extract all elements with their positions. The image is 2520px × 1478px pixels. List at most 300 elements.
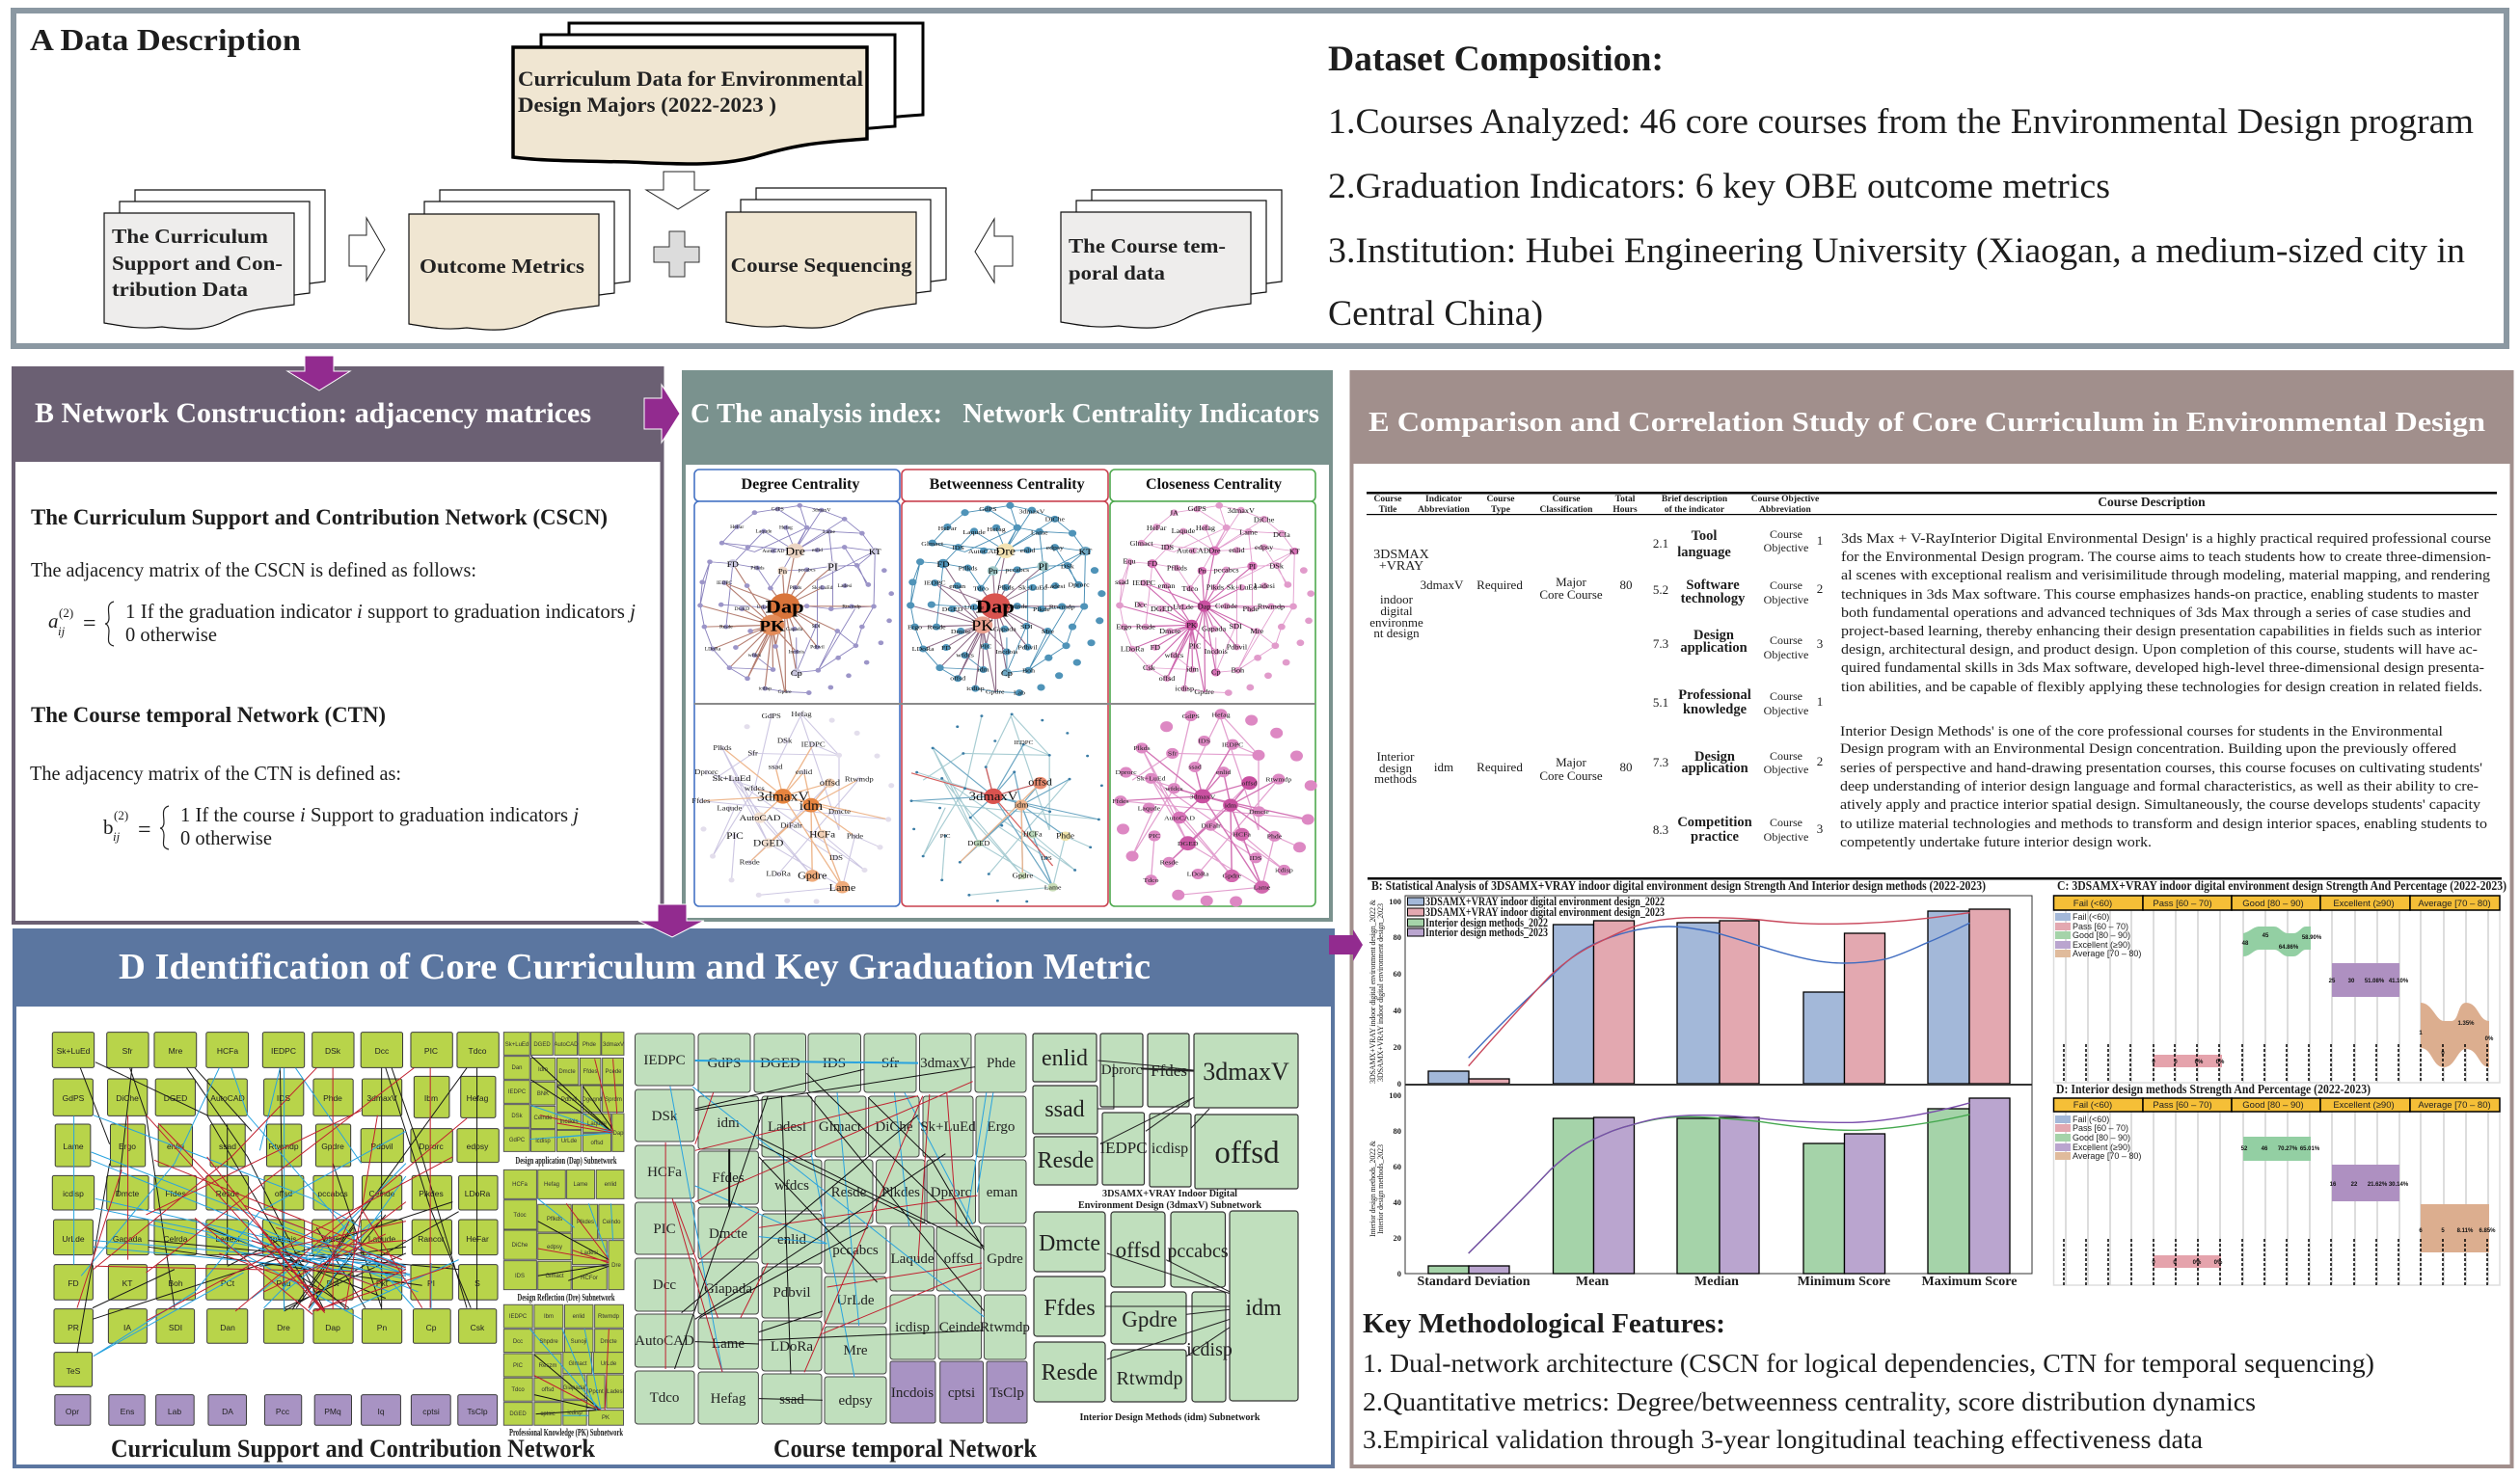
graph: betweenness centrality CSCN: GdPS <box>979 506 997 513</box>
document stack: curriculum support data: tribution Data <box>112 278 249 301</box>
subnetwork: design reflection: Plkdes <box>577 1220 594 1225</box>
subnetwork: idm: Ffdes <box>1043 1296 1096 1321</box>
chart D: interior design strength and percentage: 16 <box>2330 1182 2337 1188</box>
course temporal network: Lame <box>712 1336 745 1352</box>
course table: design <box>1379 761 1412 775</box>
document stack: course sequencing: Course Sequencing <box>731 254 912 277</box>
course table: Course <box>1770 749 1802 763</box>
CSCN definition <box>31 505 636 646</box>
graph: betweenness centrality CTN: DGED <box>967 839 990 847</box>
curriculum support and contribution network: Mre <box>169 1046 183 1056</box>
subnetwork: design application: Pcede <box>605 1069 622 1075</box>
course temporal network: IDS <box>823 1056 846 1071</box>
curriculum support and contribution network: DSk <box>325 1046 341 1056</box>
curriculum support and contribution network: IEDPC <box>271 1046 296 1056</box>
subnetwork: professional knowledge: icdisp <box>567 1411 583 1416</box>
curriculum support and contribution network: Pcc <box>276 1407 290 1416</box>
subnetwork: professional knowledge: UrLde <box>601 1361 617 1367</box>
caption: CTN: Course temporal Network <box>773 1435 1038 1463</box>
graph: closeness centrality CSCN: icdisp <box>1175 685 1194 692</box>
course description: 3dmaxV: for the Environmental Design program. The course aims to teach students how to create three-dimension- <box>1841 550 2491 565</box>
dataset composition text: 2.Graduation Indicators: 6 key OBE outcome metrics <box>1328 167 2110 206</box>
course table: Software <box>1686 578 1740 593</box>
chart C bands <box>2154 927 2489 1067</box>
course table: 5.2 <box>1653 582 1668 597</box>
graph: degree centrality CSCN: wfdcs <box>748 653 761 658</box>
course temporal network: Ffdes <box>712 1170 745 1186</box>
graph: degree centrality CSCN: Gapada <box>786 627 803 632</box>
graph: closeness centrality CSCN: FD <box>1148 560 1158 568</box>
graph: degree centrality CSCN: AutoCAD <box>762 549 785 554</box>
graph: degree centrality CSCN: PK <box>759 617 785 634</box>
chart C legend <box>2055 912 2141 958</box>
document stack: curriculum data: Design Majors (2022-2023 ) <box>518 93 776 117</box>
panel C: centrality indicators: Closeness Centrality <box>1146 476 1282 493</box>
graph: betweenness centrality CSCN: icdisp <box>966 685 985 692</box>
graph: degree centrality CTN: PIC <box>726 832 744 842</box>
subnetwork: design application: Ceinde <box>533 1115 553 1121</box>
chart D: interior design strength and percentage: D: Interior design methods Strength And Percentage (2022-2023) <box>2056 1082 2371 1096</box>
subnetwork: professional knowledge: Rtwmdp <box>598 1314 620 1320</box>
subnetwork: professional knowledge: Glmact <box>568 1361 587 1367</box>
chart D: interior design strength and percentage: 65.01% <box>2300 1146 2320 1152</box>
graph: closeness centrality CTN: IDS <box>1250 855 1261 862</box>
graph: degree centrality CSCN: Pn <box>778 568 787 576</box>
curriculum support and contribution network: Sfr <box>122 1046 133 1056</box>
subnetwork: design application: Dan <box>511 1065 523 1071</box>
curriculum support and contribution network: ssad <box>219 1142 236 1151</box>
graph: degree centrality CSCN <box>700 505 891 695</box>
subnetwork: professional knowledge: IEDPC <box>509 1314 528 1320</box>
graph: degree centrality CTN: idm <box>799 799 824 814</box>
course table: 5.1 <box>1653 695 1668 710</box>
subnetwork: idm: pccabcs <box>1167 1241 1229 1262</box>
course temporal network: ssad <box>779 1392 804 1408</box>
chart C: 3DSMAX strength and percentage: 41.10% <box>2389 979 2409 984</box>
chart B: statistical analysis bars: Interior design methods_2023 <box>1376 1144 1385 1234</box>
icon: plus <box>654 231 699 277</box>
course temporal network: Mre <box>843 1343 868 1358</box>
chart B axes labels: 20 <box>1393 1042 1401 1052</box>
curriculum support and contribution network: Lame <box>63 1142 84 1151</box>
course table: environme <box>1369 615 1423 630</box>
chart D: interior design strength and percentage: 30.14% <box>2389 1182 2409 1188</box>
graph: degree centrality CTN: Dmcte <box>828 808 851 816</box>
graph: betweenness centrality CTN: PIC <box>940 834 951 840</box>
subnetwork: professional knowledge: enlid <box>573 1314 584 1320</box>
curriculum support and contribution network: PIC <box>424 1046 438 1056</box>
course temporal network: Rtwmdp <box>980 1320 1030 1335</box>
course description: idm <box>1840 724 2487 850</box>
curriculum support and contribution network: Dre <box>277 1323 290 1332</box>
subnetwork: professional knowledge: Sunoji <box>571 1339 586 1345</box>
graph: closeness centrality CTN: DiFalr <box>1201 822 1221 829</box>
graph: closeness centrality CSCN: DSk <box>1269 562 1284 570</box>
curriculum support and contribution network: IA <box>123 1323 131 1332</box>
course temporal network: Hefag <box>711 1391 746 1407</box>
CTN definition: ij <box>113 829 121 844</box>
course table: 2.1 <box>1653 536 1668 551</box>
subnetwork: 3dmaxV: Ffdes <box>1151 1061 1187 1080</box>
course description: 3dmaxV: 3ds Max + V-RayInterior Digital Environmental Design' is a highly practical required professional course <box>1841 531 2491 547</box>
chart D: interior design strength and percentage <box>2054 1082 2500 1285</box>
graph: closeness centrality CSCN: pccabcs <box>1214 566 1239 574</box>
curriculum support and contribution network: Ladesi <box>215 1234 240 1244</box>
subnetwork: design application: AutoCAD <box>554 1042 579 1048</box>
graph: closeness centrality CSCN: PK <box>1186 621 1197 630</box>
course table: Objective <box>1764 704 1808 717</box>
curriculum support and contribution network: Ppt <box>327 1278 339 1288</box>
subnetwork: 3dmaxV: ssad <box>1044 1097 1085 1122</box>
graph: betweenness centrality CSCN: Hefag <box>988 525 1006 533</box>
subnetwork: professional knowledge: Tdco <box>511 1387 525 1393</box>
graph: closeness centrality CTN: Plkds <box>1133 745 1151 752</box>
curriculum support and contribution network: Hefag <box>467 1093 489 1103</box>
graph: degree centrality CSCN: pccabcs <box>799 568 816 573</box>
graph: degree centrality CSCN: UrLde <box>757 605 772 610</box>
graph: betweenness centrality CSCN: Pflkds <box>959 565 978 572</box>
course table: digital <box>1380 604 1413 618</box>
curriculum support and contribution network: offsd <box>275 1189 292 1198</box>
graph: betweenness centrality CSCN: Glmact <box>921 541 943 548</box>
graph: degree centrality CSCN: Rtwmdp <box>842 605 861 609</box>
column headers <box>694 470 1315 906</box>
graph: betweenness centrality CSCN: Mre <box>1042 628 1054 635</box>
course table: Course <box>1770 633 1802 647</box>
graph: degree centrality CTN: Plkds <box>713 744 732 752</box>
dataset composition text: 3.Institution: Hubei Engineering University (Xiaogan, a medium-sized city in <box>1328 231 2465 271</box>
course temporal network: Glmact <box>819 1119 862 1135</box>
chart B axes labels <box>1389 897 1401 1278</box>
course temporal network: Tdco <box>650 1390 679 1406</box>
curriculum support and contribution network: TsClp <box>467 1407 488 1416</box>
graph: betweenness centrality CSCN: Gapada <box>993 626 1017 632</box>
arrow: right <box>349 218 385 281</box>
course temporal network: IEDPC <box>643 1053 686 1068</box>
chart D: interior design strength and percentage: 70.27% <box>2278 1146 2298 1152</box>
curriculum support and contribution network: Opr <box>66 1407 79 1416</box>
graph: closeness centrality CSCN: UrLde <box>1173 604 1194 611</box>
subnetwork: idm: Interior Design Methods (idm) Subnetwork <box>1080 1411 1260 1423</box>
graph: closeness centrality CTN: DGED <box>1178 840 1199 847</box>
subnetwork: professional knowledge: offsd <box>542 1387 554 1393</box>
subnetwork: professional knowledge: Ppcnt <box>588 1389 604 1395</box>
course temporal network: AutoCAD <box>635 1333 694 1349</box>
graph: degree centrality CTN: Lame <box>829 883 855 894</box>
subnetwork: 3dmaxV: icdisp <box>1152 1141 1188 1157</box>
graph: betweenness centrality CSCN <box>908 505 1101 696</box>
subnetwork: design application <box>503 1033 624 1167</box>
document stack: outcome metrics <box>409 190 630 330</box>
graph: betweenness centrality CSCN: 3dmaxV <box>1019 508 1045 515</box>
subnetwork: design reflection: HCFor <box>581 1276 598 1281</box>
curriculum support and contribution network: Celrda <box>163 1234 188 1244</box>
chart C: 3DSMAX strength and percentage: 1 <box>2419 1031 2423 1036</box>
chart D: interior design strength and percentage: 8.11% <box>2457 1228 2474 1234</box>
course temporal network: Plkdes <box>881 1185 920 1200</box>
graph: betweenness centrality CSCN: FD <box>941 644 951 652</box>
chart C: 3DSMAX strength and percentage: 0 <box>2152 1060 2155 1065</box>
panel D: core curriculum identification <box>14 356 1363 1466</box>
course temporal network: Ergo <box>988 1119 1015 1135</box>
course table: Design <box>1694 749 1735 765</box>
graph: closeness centrality CSCN: Incdois <box>1205 648 1228 656</box>
subnetwork: 3dmaxV: enlid <box>1042 1046 1088 1071</box>
course table: Objective <box>1764 593 1808 606</box>
course table: 3DSMAX <box>1373 548 1429 562</box>
graph: closeness centrality CTN: Dmcte <box>1249 808 1269 816</box>
graph: closeness centrality CTN: Sfr <box>1168 750 1178 758</box>
curriculum support and contribution network: Pau <box>276 1278 291 1288</box>
graph: degree centrality CSCN: IEDPC <box>717 580 733 586</box>
graph: betweenness centrality CSCN: Lab <box>1014 689 1025 696</box>
chart B axes labels: 60 <box>1393 1162 1401 1171</box>
graph: betweenness centrality CTN <box>911 714 1101 901</box>
subnetwork: design application: Phde <box>583 1042 597 1048</box>
course table: 1 <box>1817 694 1823 709</box>
graph: degree centrality CTN: Rtwmdp <box>845 775 874 783</box>
chart B axes labels: 80 <box>1393 1126 1401 1136</box>
course table: Abbreviation <box>1418 505 1471 515</box>
graph: degree centrality CSCN: GdPS <box>772 507 784 512</box>
course table: Type <box>1491 505 1510 515</box>
panel C: centrality indicators: Degree Centrality <box>741 476 860 493</box>
course temporal network: eman <box>987 1185 1018 1200</box>
curriculum support and contribution network: Ens <box>121 1407 134 1416</box>
subnetwork: design application: Sk+LuEd <box>505 1042 528 1048</box>
subnetwork: design application: 3dmaxV <box>603 1042 624 1048</box>
chart C: 3DSMAX strength and percentage: 0% <box>2195 1060 2204 1065</box>
curriculum support and contribution network: Dprorc <box>419 1142 444 1151</box>
course table: Course <box>1373 495 1402 504</box>
CTN definition: 0 otherwise <box>180 826 272 849</box>
graph: betweenness centrality CTN: Phde <box>1056 831 1074 840</box>
graph: closeness centrality CTN: IEDPC <box>1222 741 1244 748</box>
graph: closeness centrality CSCN: edpsy <box>1255 544 1273 551</box>
course table: Competition <box>1677 815 1752 830</box>
chart B legend: Interior design methods_2023 <box>1425 925 1548 939</box>
course temporal network: Sfr <box>881 1056 899 1071</box>
CSCN definition: The adjacency matrix of the CSCN is defined as follows: <box>31 558 476 581</box>
chart C: 3DSMAX strength and percentage: 25 <box>2329 979 2336 984</box>
subnetwork: design reflection: Dre <box>611 1263 621 1269</box>
curriculum support and contribution network: Boh <box>168 1278 183 1288</box>
course table: 3dmaxV <box>1421 578 1464 592</box>
chart D legend: Excellent (≥90) <box>2073 1142 2130 1152</box>
course table: 80 <box>1620 578 1632 592</box>
graph: betweenness centrality CSCN: Ergo <box>908 624 922 631</box>
curriculum support and contribution network: Plkdes <box>419 1189 444 1198</box>
graph: betweenness centrality CSCN: IDS <box>952 545 964 551</box>
chart D: interior design strength and percentage: 21.62% <box>2368 1182 2388 1188</box>
chart C: 3DSMAX strength and percentage: 1.35% <box>2457 1021 2475 1027</box>
curriculum support and contribution network: PR <box>68 1323 79 1332</box>
course table: indoor <box>1380 592 1414 606</box>
chart C: 3DSMAX strength and percentage: 58.90% <box>2302 935 2322 941</box>
document stack: curriculum support data: The Curriculum <box>112 225 269 248</box>
graph: betweenness centrality CSCN: Ceinde <box>1007 603 1028 610</box>
CSCN definition: ij <box>58 624 66 638</box>
panel B: network construction <box>14 368 664 923</box>
graph: betweenness centrality CSCN: Rtwmdp <box>1049 604 1075 610</box>
course table: Course <box>1770 527 1802 541</box>
course table: Objective <box>1764 830 1808 844</box>
heading D: D Identification of Core Curriculum and Key Graduation Metric <box>119 947 1151 987</box>
chart B legend <box>1408 894 1665 939</box>
chart C: 3DSMAX strength and percentage: 51.08% <box>2365 979 2385 984</box>
chart C: 3DSMAX strength and percentage: 0 <box>2441 1051 2445 1057</box>
course table: of the indicator <box>1665 505 1725 515</box>
dataset composition text: Central China) <box>1328 294 1543 334</box>
graph: degree centrality CTN: DSk <box>777 737 793 745</box>
subnetwork: 3dmaxV: 3DSAMX+VRAY Indoor Digital <box>1102 1188 1237 1199</box>
graph: degree centrality CTN: Dprorc <box>694 767 718 776</box>
curriculum support and contribution network: Sk+LuEd <box>57 1046 91 1056</box>
graph: betweenness centrality CSCN: LDoRa <box>912 645 935 653</box>
graph: degree centrality CTN: IDS <box>829 854 843 862</box>
course description: 3dmaxV: design, architectural design, and product design. Upon completion of this course, students will have ac- <box>1841 642 2478 658</box>
chart B: statistical analysis bars: Minimum Score <box>1798 1275 1890 1289</box>
course temporal network: edpsy <box>839 1393 873 1409</box>
graph: closeness centrality CTN: PIC <box>1149 833 1160 840</box>
chart B axes labels: 80 <box>1393 932 1401 942</box>
chart B axes labels: 100 <box>1389 897 1401 906</box>
graph: closeness centrality CSCN: wfdcs <box>1165 651 1183 659</box>
course description: idm: Interior Design Methods' is one of the core professional courses for students in the Environmental <box>1840 724 2443 739</box>
key methodological features: Key Methodological Features: <box>1363 1308 1725 1339</box>
graph: closeness centrality CSCN: SDI <box>1230 623 1242 631</box>
chart D legend: Good [80 – 90) <box>2073 1133 2130 1142</box>
graph: degree centrality CTN: AutoCAD <box>740 814 780 823</box>
chart C: 3DSMAX strength and percentage: 0 <box>2174 1060 2178 1065</box>
graph: degree centrality CTN: Laqude <box>717 804 743 812</box>
course table: Title <box>1379 505 1396 515</box>
subnetwork: design application: GdPC <box>509 1138 526 1143</box>
curriculum support and contribution network: pccabcs <box>317 1189 348 1198</box>
course temporal network: offsd <box>944 1251 974 1267</box>
subnetwork: design reflection: Ceindo <box>602 1220 621 1225</box>
graph: degree centrality CTN: wfdcs <box>745 785 765 793</box>
subnetwork: design application: Dap <box>612 1131 624 1137</box>
graph: degree centrality CSCN: HeFar <box>730 524 744 530</box>
graph: closeness centrality CTN: wfdcs <box>1165 785 1183 793</box>
graph: closeness centrality CTN: Sk+LuEd <box>1137 775 1166 782</box>
graph: closeness centrality CSCN: Mre <box>1250 627 1264 635</box>
subnetwork: design reflection: Lame <box>573 1182 588 1188</box>
graph: closeness centrality CSCN: Pdbvil <box>1227 643 1247 651</box>
subnetwork: 3dmaxV: IEDPC <box>1099 1139 1148 1157</box>
chart B axes labels: 100 <box>1389 1090 1401 1100</box>
chart D: interior design strength and percentage: 0 <box>2173 1260 2177 1266</box>
chart B: statistical analysis bars: Interior design methods_2022 & <box>1368 1140 1377 1237</box>
subnetwork: professional knowledge: PIC <box>513 1363 524 1369</box>
chart B: statistical analysis bars <box>1368 878 2032 1289</box>
curriculum support and contribution network: Dcc <box>375 1046 390 1056</box>
course table: Abbreviation <box>1759 505 1812 515</box>
chart D: interior design strength and percentage: 0 <box>2152 1260 2155 1266</box>
graph: betweenness centrality CSCN: DGED <box>942 605 962 613</box>
graph: betweenness centrality CSCN: AutoCAD <box>968 548 999 555</box>
curriculum support and contribution network: PCt <box>221 1278 235 1288</box>
graph: closeness centrality CSCN: enlid <box>1229 547 1245 554</box>
curriculum support and contribution network: Resde <box>216 1189 240 1198</box>
course table: Objective <box>1764 763 1808 776</box>
course temporal network: DSk <box>652 1109 678 1124</box>
graph: closeness centrality CTN: Dprorc <box>1115 768 1137 776</box>
chart C legend: Excellent (≥90) <box>2073 940 2130 950</box>
key methodological features: 2.Quantitative metrics: Degree/betweenness centrality, score distribution dynamics <box>1363 1387 2256 1416</box>
course temporal network: Gpdre <box>987 1251 1023 1267</box>
dataset composition text: Dataset Composition: <box>1328 40 1664 79</box>
curriculum support and contribution network: Dmcte <box>116 1189 140 1198</box>
graph: closeness centrality CSCN: LDoRa <box>1121 645 1145 653</box>
CTN definition: The Course temporal Network (CTN) <box>31 703 386 728</box>
course description: 3dmaxV: both fundamental operations and advanced techniques of 3ds Max through a series of case studies and <box>1841 605 2472 621</box>
graph: betweenness centrality CTN: IDS <box>1042 855 1052 862</box>
arrow: D to E <box>1329 929 1363 961</box>
course table: Required <box>1477 578 1523 592</box>
curriculum support and contribution network: wfdcs <box>321 1234 343 1244</box>
graph: degree centrality CTN: Resde <box>740 858 760 866</box>
graph: closeness centrality CSCN <box>1115 505 1311 696</box>
document stack: curriculum support data <box>104 190 325 329</box>
graph: closeness centrality CTN: enlid <box>1216 768 1232 776</box>
curriculum support and contribution network: Rancor <box>418 1234 445 1244</box>
graph: closeness centrality CTN: Resde <box>1160 859 1179 866</box>
subnetwork: professional knowledge: cptsic <box>540 1411 555 1417</box>
graph: betweenness centrality CSCN: SDI <box>1020 623 1033 631</box>
graph: degree centrality CTN: Sfr <box>747 749 758 758</box>
course temporal network: Laqude <box>891 1251 935 1267</box>
chart D: interior design strength and percentage: 22 <box>2351 1182 2358 1188</box>
graph: betweenness centrality CTN: IEDPC <box>1014 740 1033 746</box>
CTN definition: (2) <box>114 808 128 822</box>
chart D legend: Pass [60 – 70) <box>2073 1123 2128 1133</box>
course temporal network: Pdbvil <box>772 1285 811 1301</box>
document stack: course temporal data <box>1061 190 1282 328</box>
subnetwork: idm: idm <box>1245 1296 1282 1321</box>
graph: degree centrality CSCN: Laqude <box>755 529 772 534</box>
course table: Tool <box>1692 528 1717 544</box>
chart D: interior design strength and percentage: 6 <box>2419 1228 2423 1234</box>
course temporal network: 3dmaxV <box>920 1056 970 1071</box>
curriculum support and contribution network: 3dmaxV <box>366 1093 397 1103</box>
subnetwork: professional knowledge: DGED <box>509 1411 527 1417</box>
curriculum support and contribution network: Incdois <box>271 1234 296 1244</box>
course table: 1 <box>1817 533 1823 548</box>
graph: betweenness centrality CSCN: Dre <box>995 545 1016 557</box>
chart B axes labels: 0 <box>1397 1079 1401 1088</box>
curriculum support and contribution network: Cp <box>426 1323 437 1332</box>
graph: closeness centrality CSCN: AutoCAD <box>1177 547 1209 554</box>
course table: Professional <box>1678 687 1751 703</box>
curriculum support and contribution network: DGED <box>164 1093 187 1103</box>
course table: 3 <box>1817 821 1823 836</box>
graph: betweenness centrality CSCN: PIC <box>980 643 991 650</box>
subnetwork: design reflection: enlid <box>605 1182 616 1188</box>
subnetwork: design application: Laqude <box>587 1121 608 1127</box>
subnetwork: design application: icdisp <box>535 1139 551 1144</box>
graph: betweenness centrality CSCN: Sk+LuEd <box>1018 584 1047 591</box>
course temporal network: wfdcs <box>774 1178 809 1194</box>
course temporal network: Incdois <box>891 1385 934 1401</box>
chart B axes labels: 20 <box>1393 1233 1401 1243</box>
course temporal network: DGED <box>760 1056 800 1071</box>
document stack: curriculum support data: Support and Con- <box>112 252 283 275</box>
chart B: statistical analysis bars: Standard Deviation <box>1417 1275 1531 1289</box>
graph: closeness centrality CSCN: Lame <box>1239 528 1259 536</box>
course table: Course <box>1770 816 1802 829</box>
